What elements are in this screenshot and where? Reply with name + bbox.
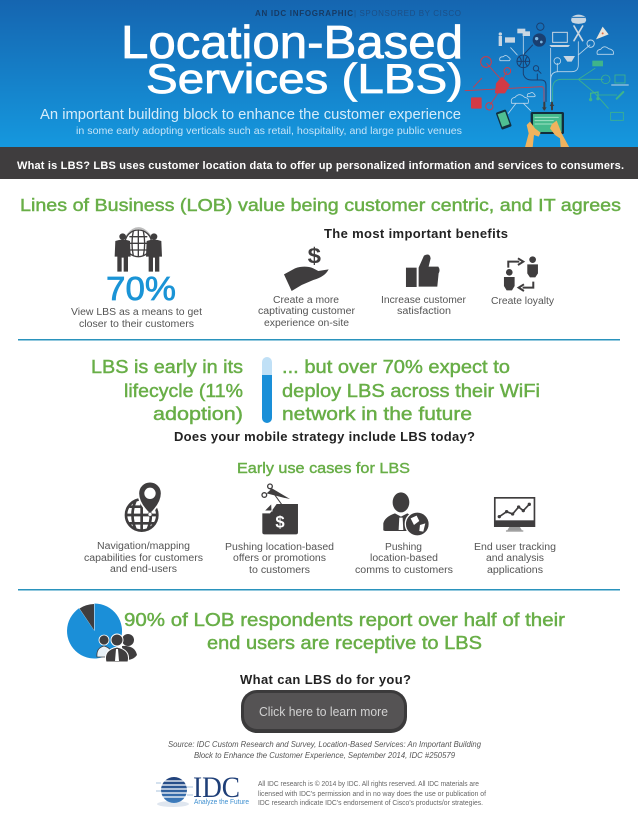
legal text: IDC research indicate IDC's endorsement of Cisco's products/or strategies. [258, 800, 483, 807]
benefit caption: loyalty: Create loyalty [491, 296, 554, 307]
use case caption: comms [355, 542, 453, 576]
question: Does your mobile strategy include LBS today? [174, 429, 475, 444]
sponsor line: AN IDC INFOGRAPHIC [255, 9, 353, 18]
header banner [0, 0, 638, 147]
icon: person with globe [383, 492, 429, 536]
button: Click here to learn more [259, 705, 388, 719]
network lines dark [523, 45, 546, 102]
benefits heading: The most important benefits [324, 226, 508, 241]
left statement: lifecycle (11% [124, 380, 243, 401]
icon: scissors and coupon [262, 484, 298, 534]
benefit caption: experience [258, 295, 356, 329]
use case caption: comms: location-based [370, 553, 438, 564]
stat caption [71, 307, 202, 330]
CTA heading: What can LBS do for you? [240, 672, 411, 687]
use case caption: tracking: and analysis [486, 553, 544, 564]
left statement: adoption) [153, 403, 243, 424]
magnifier [533, 66, 541, 73]
laptop [553, 32, 567, 42]
stat statement [124, 609, 565, 653]
stat caption: closer to their customers [79, 319, 194, 330]
use case caption: tracking [474, 542, 556, 576]
globe dark [533, 33, 546, 47]
source note: Block to Enhance the Customer Experience, September 2014, IDC #250579 [194, 751, 456, 760]
panel: 70 percent stat [71, 228, 202, 330]
network lines white [508, 33, 590, 113]
IDC logo: IDC [193, 771, 240, 804]
illustration: connected devices tree [465, 15, 628, 147]
title [121, 16, 463, 102]
icon: hand with dollar [284, 243, 329, 291]
pizza [596, 27, 609, 39]
clouds [500, 47, 614, 103]
use case caption: tracking: End user tracking [474, 542, 556, 553]
network lines red [465, 63, 544, 105]
legal text: All IDC research is © 2014 by IDC. All rights reserved. All IDC materials are [258, 780, 479, 788]
icon: businessmen with globe [115, 228, 162, 272]
icon: people loyalty [504, 256, 538, 291]
benefit caption: experience: experience on-site [264, 318, 349, 329]
panel: lifecycle statement [91, 356, 540, 444]
sub-subtitle: in some early adopting verticals such as retail, hospitality, and large public venues [76, 125, 462, 137]
sponsor line [255, 9, 461, 18]
pie chart [67, 604, 122, 658]
tablet [531, 112, 564, 134]
benefit caption: satisfaction: satisfaction [397, 306, 451, 317]
IDC logo [156, 771, 249, 807]
use case caption: navigation [84, 541, 203, 575]
icon: thumbs up [406, 254, 440, 287]
use case caption: navigation: Navigation/mapping [97, 541, 190, 552]
title: Services (LBS) [146, 55, 463, 102]
use case caption: offers: Pushing location-based [225, 542, 334, 553]
red icons [481, 57, 511, 110]
stat value: 70% [106, 270, 176, 307]
benefit caption: satisfaction [381, 295, 467, 317]
section heading: lines of business: Lines of Business (LOB) value being customer centric, and IT agrees [20, 195, 621, 215]
thermometer gauge [262, 357, 272, 423]
subtitle: An important building block to enhance the customer experience [40, 106, 461, 123]
IDC logo: Analyze the Future [194, 799, 249, 806]
source note: Source: IDC Custom Research and Survey, Location-Based Services: An Important Building [168, 740, 482, 749]
call to action [240, 672, 411, 733]
source note [168, 740, 482, 760]
right statement: network in the future [282, 403, 472, 424]
icon: scissors and coupon: $ [275, 512, 285, 531]
network lines green [553, 68, 617, 108]
title: Location-Based [121, 16, 463, 68]
shopper and chat [499, 29, 530, 46]
hands [525, 122, 541, 147]
use case caption: comms: Pushing [385, 542, 422, 553]
stat statement: end users are receptive to LBS [207, 632, 482, 653]
use cases heading: Early use cases for LBS [237, 461, 410, 477]
benefit caption: experience: Create a more [273, 295, 339, 306]
stat statement: 90% of LOB respondents report over half of their [124, 609, 565, 630]
panel: benefits [258, 226, 554, 329]
use case caption: offers [225, 542, 334, 576]
icon: monitor chart [494, 497, 535, 532]
legal text: licensed with IDC's permission and in no way does the use or publication of [258, 791, 486, 798]
globe icon [517, 55, 530, 68]
use case caption: offers: to customers [249, 565, 310, 576]
right statement [282, 356, 540, 424]
sponsor line: | SPONSORED BY CISCO [354, 9, 461, 18]
right statement: deploy LBS across their WiFi [282, 380, 540, 401]
benefit caption: experience: captivating customer [258, 306, 356, 317]
arrows to tablet [544, 103, 552, 109]
icon: globe with pin [126, 482, 162, 531]
use case caption: tracking: applications [487, 565, 543, 576]
use case caption: navigation: and end-users [110, 564, 177, 575]
plate, fork [571, 15, 586, 24]
benefit caption: satisfaction: Increase customer [381, 295, 467, 306]
left statement: LBS is early in its [91, 356, 243, 377]
legal text [258, 780, 486, 807]
phone [496, 109, 512, 130]
panel: early use cases [84, 461, 556, 576]
icon: three people [97, 634, 137, 662]
definition bar [0, 147, 638, 179]
definition bar: What is LBS? LBS uses customer location data to offer up personalized information and services to consumers. [17, 160, 624, 172]
right statement: ... but over 70% expect to [282, 356, 510, 377]
button [241, 690, 407, 733]
use case caption: comms: comms to customers [355, 565, 453, 576]
left statement [91, 356, 243, 424]
stat caption: View LBS as a means to get [71, 307, 202, 318]
green icons [592, 61, 603, 66]
icon: hand with dollar: $ [308, 243, 321, 268]
panel: 90 percent stat [67, 604, 565, 662]
use case caption: offers: offers or promotions [233, 553, 326, 564]
use case caption: navigation: capabilities for customers [84, 553, 203, 564]
